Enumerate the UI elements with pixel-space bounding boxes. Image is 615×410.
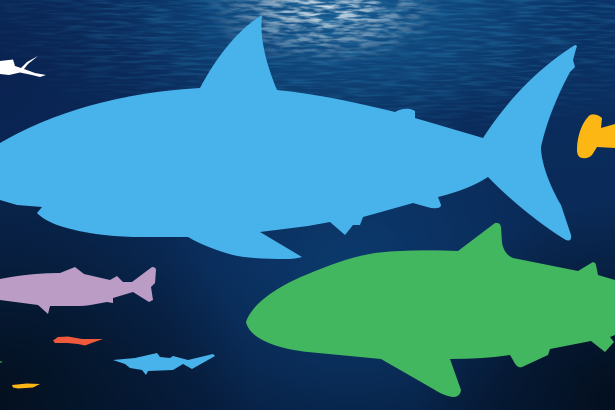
- large green shark: great white: [246, 223, 615, 397]
- tiny green shark at left edge: [0, 361, 3, 363]
- small blue shark: mako: [113, 353, 215, 375]
- red shark: frilled shark: [53, 336, 103, 346]
- tiny yellow shark: dwarf lanternshark: [12, 384, 40, 388]
- swimmer silhouette: [0, 56, 46, 77]
- hammerhead shark: orange: [577, 114, 615, 158]
- large blue shark: megalodon: [0, 15, 577, 259]
- pink shark: Greenland shark: [0, 267, 156, 314]
